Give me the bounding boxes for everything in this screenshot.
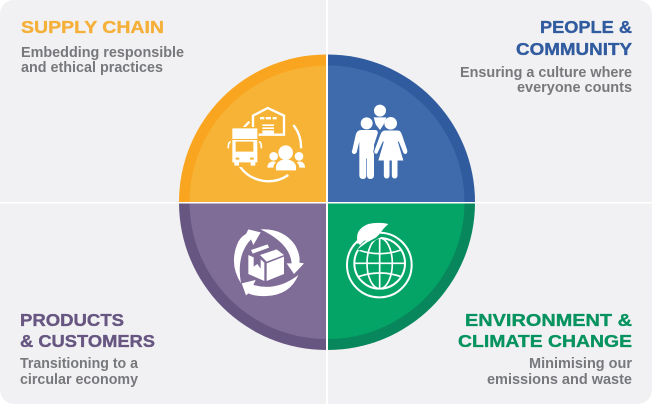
text: environment and climate change: [458, 310, 632, 388]
text: products and customers: & CUSTOMERS: [20, 331, 155, 351]
text: products and customers: circular economy: [20, 372, 138, 388]
quadrant: people and community: [328, 54, 475, 202]
text: people and community: everyone counts: [517, 80, 632, 96]
quadrant: supply chain: [179, 54, 326, 202]
text: people and community: Ensuring a culture where: [460, 65, 632, 81]
text: environment and climate change: ENVIRONMENT &: [465, 310, 632, 330]
text: supply chain: Embedding responsible: [21, 45, 184, 61]
quadrant: products and customers: [179, 204, 326, 350]
icon: family: [352, 105, 408, 179]
text: people and community: PEOPLE &: [540, 17, 632, 37]
quadrant: environment and climate change: [328, 204, 475, 350]
text: people and community: COMMUNITY: [516, 39, 632, 59]
text: environment and climate change: Minimising our: [529, 356, 632, 372]
text: environment and climate change: emissions and waste: [487, 372, 632, 388]
text: supply chain: and ethical practices: [21, 60, 163, 76]
text: products and customers: [20, 310, 155, 388]
icon: box with recycling arrows: [234, 229, 304, 296]
text: products and customers: Transitioning to a: [20, 356, 139, 372]
text: environment and climate change: CLIMATE CHANGE: [458, 331, 632, 351]
icon: globe with leaf: [347, 223, 412, 297]
text: supply chain: SUPPLY CHAIN: [21, 17, 164, 37]
text: people and community: [460, 17, 632, 96]
icon: warehouse, truck and people cycle: [228, 108, 305, 181]
text: supply chain: [21, 17, 184, 76]
text: products and customers: PRODUCTS: [20, 310, 124, 330]
